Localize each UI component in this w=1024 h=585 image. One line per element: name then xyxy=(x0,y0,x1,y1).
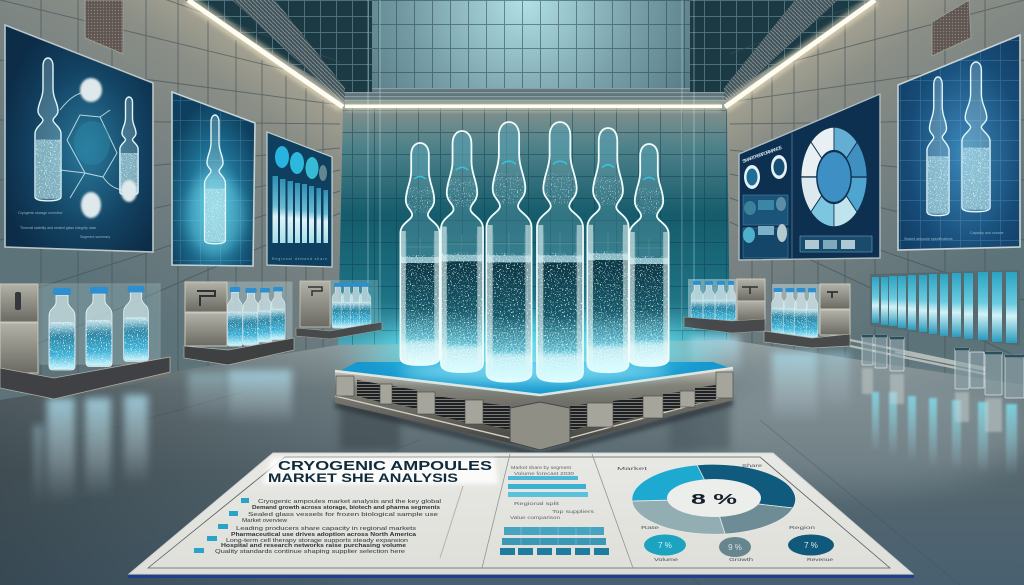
mini panels xyxy=(743,195,788,258)
metric labels xyxy=(654,557,833,563)
ampoule 6 xyxy=(627,144,671,368)
donut labels: Region xyxy=(789,525,816,531)
metric circle 3: 7 % xyxy=(804,541,818,550)
wheel chart xyxy=(801,127,867,227)
mini bar chart xyxy=(508,465,595,520)
donut labels: Market xyxy=(617,466,648,472)
mini bar chart: Value comparison xyxy=(510,515,561,520)
poster: glowing ampoule xyxy=(172,92,255,266)
icon: gauge circles xyxy=(744,155,787,189)
bar chart xyxy=(272,176,328,243)
body text: Cryogenic ampoules market analysis and the key global xyxy=(258,499,441,505)
body text: Quality standards continue shaping supplier selection here xyxy=(215,549,405,555)
side clamps xyxy=(336,372,733,427)
left vents xyxy=(357,380,510,430)
poster caption: Cryogenic storage overview xyxy=(18,211,63,215)
body text: Pharmaceutical use drives adoption across North America xyxy=(231,532,416,538)
metric labels: Volume xyxy=(654,557,678,563)
platform right face xyxy=(540,368,733,450)
small vials group left xyxy=(862,335,904,371)
cooler base xyxy=(764,331,850,348)
metric circle 1: 7 % xyxy=(658,541,672,550)
ampoule 2 xyxy=(439,131,485,374)
poster caption: Capacity and volume xyxy=(970,231,1004,235)
back wall xyxy=(338,106,730,346)
vials xyxy=(49,286,148,370)
far left cooler unit xyxy=(296,280,382,339)
right cooler unit near xyxy=(764,284,850,348)
right cooler unit far xyxy=(684,279,765,333)
cooler base xyxy=(296,322,382,339)
vials xyxy=(772,288,818,339)
platform xyxy=(335,362,733,458)
poster: twin ampoule blueprint xyxy=(898,35,1020,250)
ampoule 1 xyxy=(398,143,442,367)
bullets xyxy=(194,498,249,553)
small vials group right xyxy=(862,336,1024,398)
report title xyxy=(268,459,492,485)
metric circle 3 xyxy=(788,534,834,556)
right vents xyxy=(570,385,716,431)
poster caption: Segment summary xyxy=(80,235,110,239)
poster heading: SMART PERFORMANCE xyxy=(742,145,784,165)
mini bar chart: Volume forecast 2030 xyxy=(514,471,575,476)
ampoule 3 xyxy=(484,122,534,384)
document blue edge xyxy=(128,575,914,578)
report title: CRYOGENIC AMPOULES xyxy=(278,459,492,473)
ceiling mesh left xyxy=(232,0,345,105)
icon: hexagon network xyxy=(60,92,125,198)
data table xyxy=(500,527,609,555)
ampoule 5 xyxy=(585,128,631,374)
icon: left ampoule xyxy=(927,77,949,216)
poster caption: Thermal stability and sealed glass integrity data xyxy=(20,226,96,230)
cooler base xyxy=(0,357,170,399)
mini bar chart: Top suppliers xyxy=(552,509,595,514)
light strips xyxy=(188,0,875,111)
metric circle 1 xyxy=(644,534,686,556)
back wall upper glass xyxy=(335,0,730,108)
poster caption: Sealed ampoule specifications xyxy=(904,237,953,241)
body text: Leading producers share capacity in regional markets xyxy=(236,526,417,532)
poster: dashboard with wheel chart xyxy=(739,94,880,260)
middle left cooler unit xyxy=(184,282,294,365)
front left cooler unit xyxy=(0,284,170,399)
body text: Sealed glass vessels for frozen biological sample use xyxy=(248,512,438,518)
report title: MARKET SHE ANALYSIS xyxy=(268,473,458,485)
mini bar chart: Regional split xyxy=(514,501,560,506)
wall vent left xyxy=(85,0,123,54)
left wall xyxy=(0,0,343,400)
poster caption xyxy=(904,231,1004,241)
right ceiling tiles xyxy=(690,0,880,92)
donut labels xyxy=(617,463,816,531)
mini bar chart: Market share by segment xyxy=(511,465,572,470)
poster: bar dashboard xyxy=(267,132,332,267)
left ceiling tiles xyxy=(180,0,372,92)
ampoules xyxy=(398,122,671,384)
icon: dashboard circles xyxy=(275,146,327,181)
body text: Market overview xyxy=(242,518,287,524)
wall bench rails xyxy=(850,340,985,374)
glass curtain xyxy=(368,0,694,330)
body text: Hospital and research networks raise purchasing volume xyxy=(221,543,406,549)
cyan glow behind ampoules xyxy=(380,319,690,371)
donut chart xyxy=(632,464,796,534)
platform left face xyxy=(335,371,540,450)
poster caption: Regional demand share xyxy=(272,257,327,261)
floor xyxy=(0,340,1024,585)
icon: right ampoule xyxy=(962,62,990,212)
mini table xyxy=(800,236,872,252)
metric circle 2 xyxy=(719,537,751,557)
floor reflections xyxy=(0,332,1024,585)
icon: left ampoule xyxy=(35,58,61,201)
vials xyxy=(691,281,736,326)
donut labels: Rate xyxy=(641,525,660,531)
body text xyxy=(215,499,441,555)
corner block xyxy=(510,402,570,450)
ceiling mesh right xyxy=(724,0,838,105)
donut labels: Share xyxy=(742,463,762,469)
title highlight xyxy=(262,458,498,484)
vials xyxy=(227,287,285,346)
metric circle 2: 9 % xyxy=(728,543,742,552)
poster caption xyxy=(18,211,110,239)
metric labels: Growth xyxy=(729,557,754,563)
icon: ampoule xyxy=(205,115,225,244)
platform shadow xyxy=(335,398,733,458)
ampoule 4 xyxy=(535,122,585,384)
base glow over ampoules xyxy=(400,361,670,383)
body text: Demand growth across storage, biotech and pharma segments xyxy=(252,505,440,511)
metric labels: Revenue xyxy=(807,557,833,563)
back wall vent band xyxy=(338,88,728,104)
poster: ampoule molecule diagram xyxy=(5,25,153,252)
cooler base xyxy=(184,338,294,365)
icon: right ampoule xyxy=(120,97,138,195)
cooler base xyxy=(684,317,765,333)
wall vent right xyxy=(932,0,971,56)
body text: Long-term cell therapy storage supports steady expansion xyxy=(226,538,408,544)
platform top surface xyxy=(338,362,730,395)
icon: white blobs xyxy=(80,78,137,218)
vials xyxy=(332,283,371,328)
donut value: 8 % xyxy=(691,491,737,508)
right wall xyxy=(727,0,1024,385)
blue wall panels xyxy=(870,270,1020,346)
report document xyxy=(128,453,914,578)
